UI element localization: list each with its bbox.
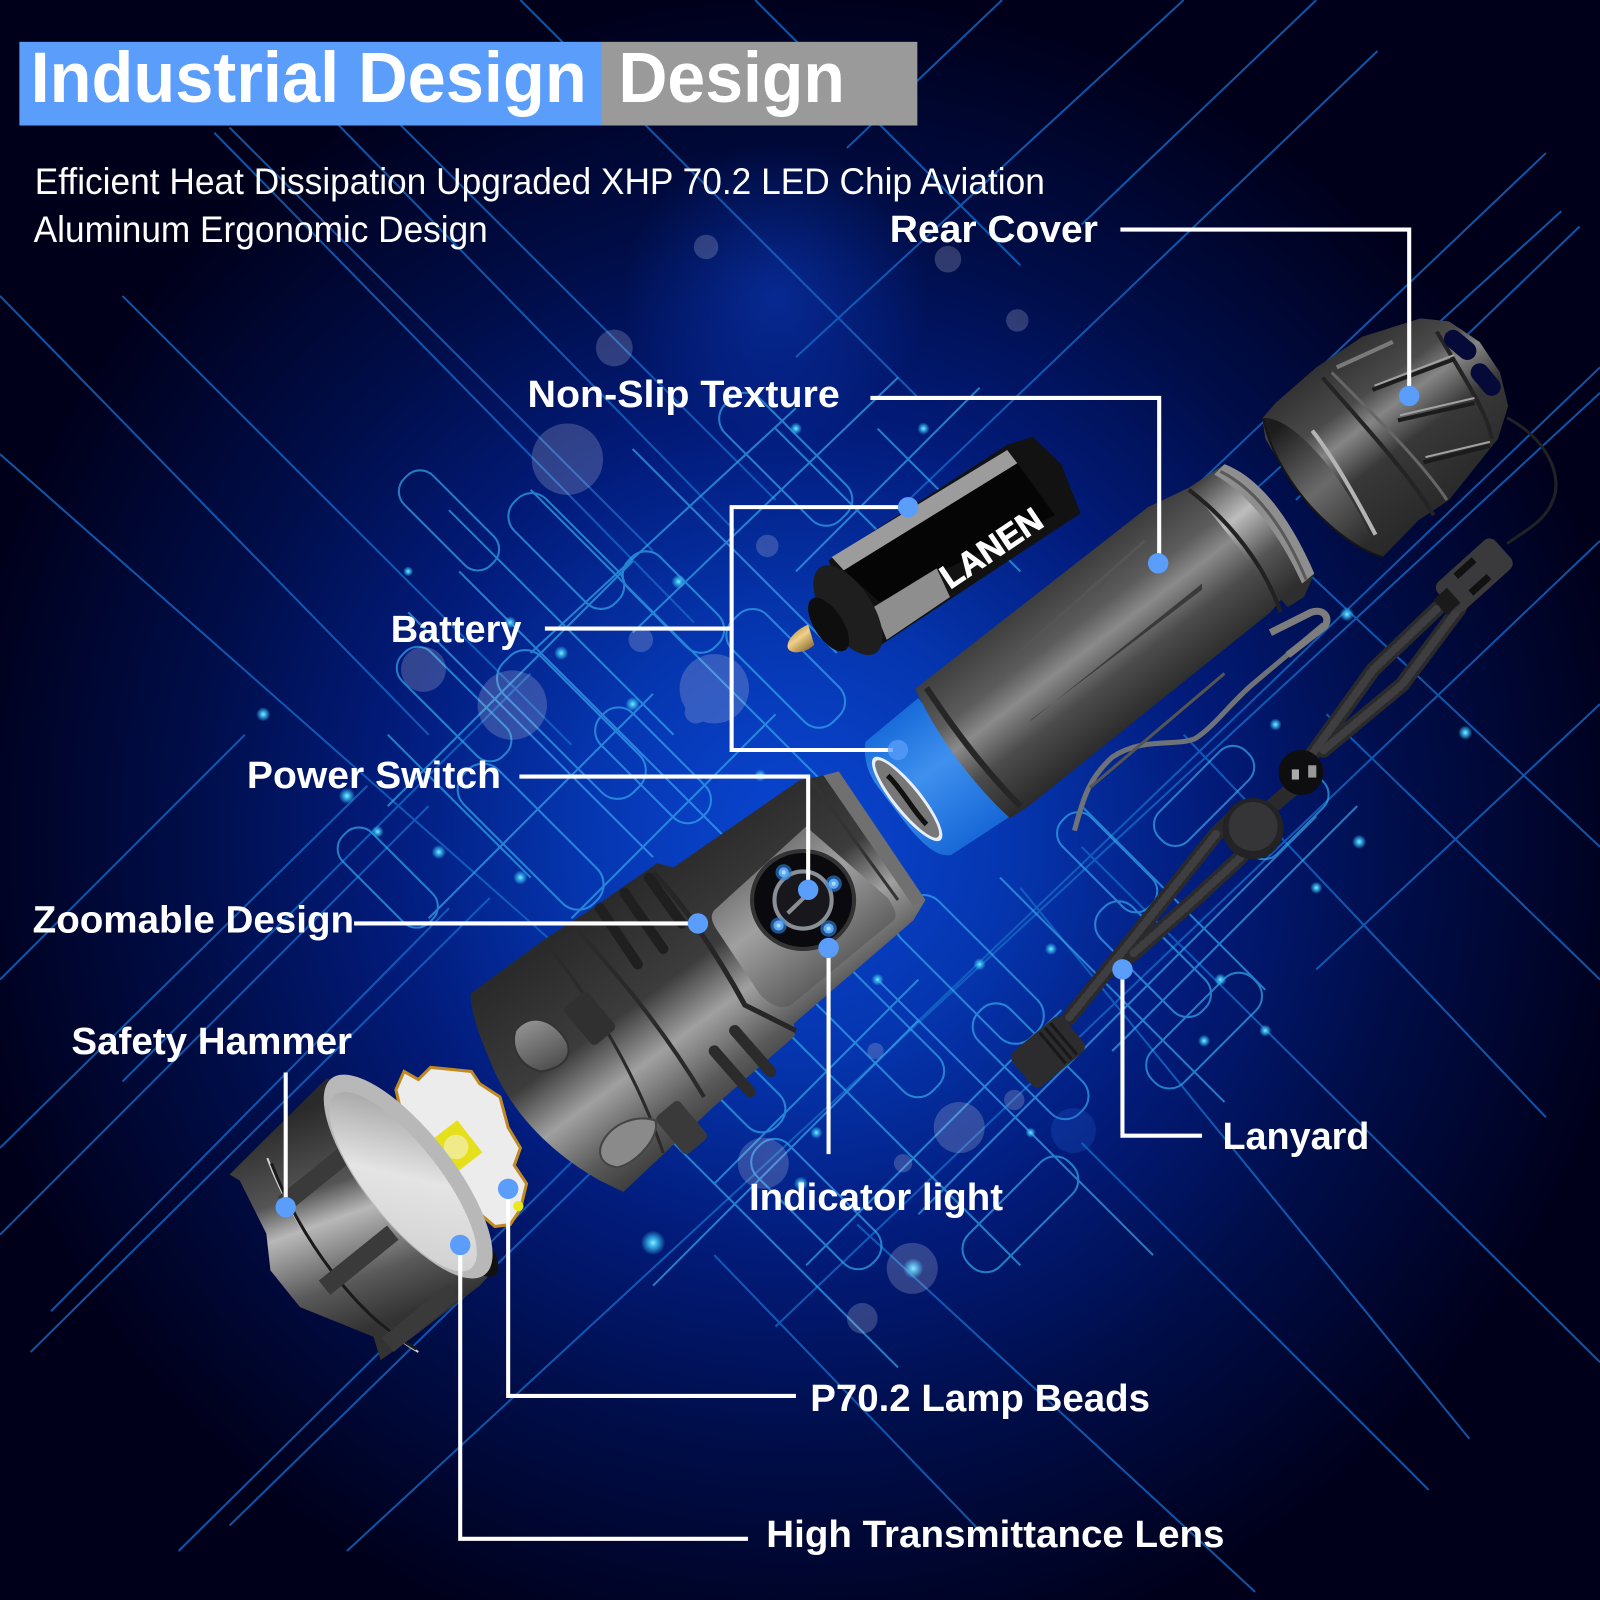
subtitle text: Aluminum Ergonomic Design bbox=[34, 209, 488, 250]
callout: power switch bbox=[247, 754, 818, 900]
circuit pattern bbox=[330, 378, 1357, 1367]
callout: lens: High Transmittance Lens bbox=[766, 1513, 1224, 1555]
subtitle text bbox=[34, 161, 1045, 250]
lanyard bead bbox=[1279, 750, 1323, 795]
rear cover bbox=[1262, 318, 1508, 557]
bokeh circles bbox=[401, 235, 1096, 1334]
callout: lens bbox=[450, 1235, 1224, 1555]
title banner: Design bbox=[618, 38, 845, 118]
tail tube: non-slip texture bbox=[915, 464, 1327, 818]
callout: battery bbox=[391, 497, 918, 760]
battery bbox=[787, 437, 1081, 666]
callout: zoomable design: Zoomable Design bbox=[33, 899, 354, 941]
title banner bbox=[19, 38, 917, 126]
callout: indicator light bbox=[749, 938, 1003, 1218]
tail wire behind tube bbox=[1074, 624, 1323, 831]
LED board bbox=[396, 1067, 527, 1227]
callout: lanyard: Lanyard bbox=[1222, 1115, 1369, 1157]
lanyard buckle bbox=[1426, 535, 1516, 621]
callout: safety hammer: Safety Hammer bbox=[71, 1020, 352, 1062]
lens bbox=[296, 1051, 520, 1302]
callout: rear cover bbox=[890, 208, 1419, 406]
inner blue battery tube bbox=[863, 698, 1010, 855]
battery brand: LANEN bbox=[934, 501, 1050, 596]
callout: indicator light: Indicator light bbox=[749, 1176, 1003, 1218]
callout: power switch: Power Switch bbox=[247, 754, 501, 796]
circuit nodes bbox=[256, 422, 1472, 1279]
callout: safety hammer bbox=[71, 1020, 352, 1217]
power switch bbox=[752, 851, 854, 949]
callout: non-slip texture bbox=[528, 373, 1168, 573]
subtitle text: Efficient Heat Dissipation Upgraded XHP 70.2 LED Chip Aviation bbox=[35, 161, 1045, 202]
lanyard slider disc bbox=[1222, 798, 1284, 859]
callout: lamp beads bbox=[498, 1179, 1150, 1419]
flashlight body bbox=[470, 771, 926, 1192]
callout: lanyard bbox=[1112, 959, 1369, 1157]
callout: battery: Battery bbox=[391, 608, 521, 650]
callout: lamp beads: P70.2 Lamp Beads bbox=[810, 1377, 1150, 1419]
lanyard bbox=[1069, 418, 1556, 1017]
callout: rear cover: Rear Cover bbox=[890, 208, 1098, 250]
bezel with lens bbox=[230, 1079, 507, 1360]
callout: zoomable design bbox=[33, 899, 708, 941]
callout: non-slip texture: Non-Slip Texture bbox=[528, 373, 840, 415]
lanyard end plug bbox=[1008, 1013, 1088, 1091]
title banner: Industrial Design bbox=[31, 38, 587, 118]
